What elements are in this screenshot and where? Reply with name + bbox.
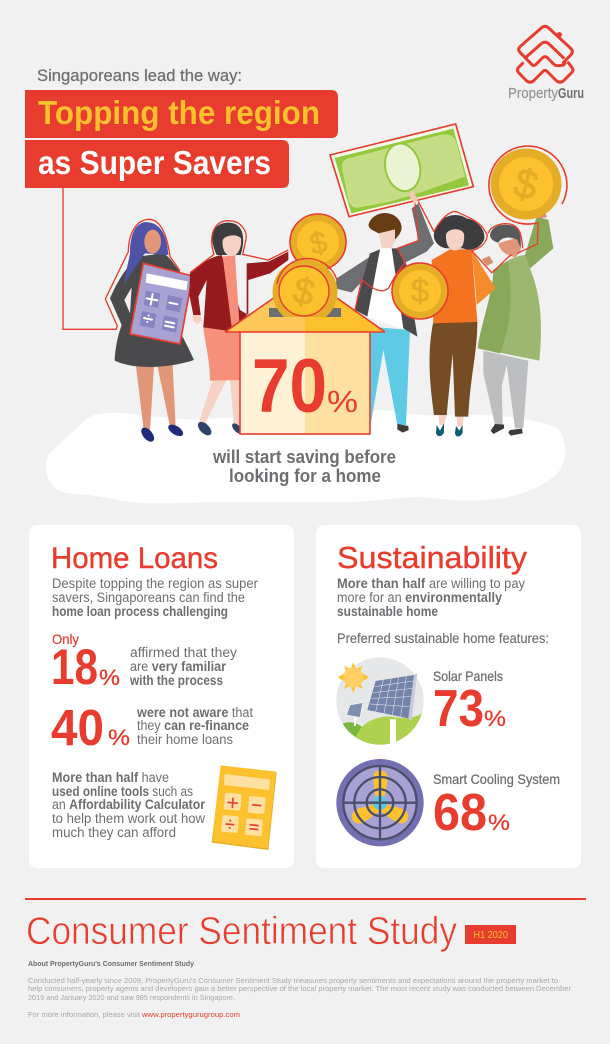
icon: yellow calculator [212,765,277,850]
house savings box [225,259,385,434]
intro text [52,576,258,619]
icon: smart cooling fan [336,759,424,846]
heading: home loans: Home Loans [51,542,218,575]
logo: PropertyGuru: Guru [558,85,584,102]
icon: purple calculator [130,263,192,344]
panel: sustainability [316,525,581,868]
intro text: more for an environmentally [337,590,502,605]
badge: H1 2020: H1 2020 [474,929,508,941]
coin: held by woman [290,214,346,270]
more information link [28,1010,240,1019]
stat: 40 percent: 40 [51,699,104,756]
stat: 18 percent: are very familiar [130,659,227,674]
text: online tools: used online tools such as [52,784,193,799]
more information link: www.propertygurugroup.com [141,1010,240,1019]
stat: 18 percent: % [99,665,120,690]
caption: will start saving: will start saving before [212,446,396,467]
text: online tools: an Affordability Calculator [52,797,206,812]
text: online tools: More than half have [52,770,169,785]
stat: solar panels 73 percent [433,668,506,738]
stat: solar panels 73 percent: % [484,706,506,731]
stat: 40 percent [51,699,253,756]
intro text: Despite topping the region as super [52,576,258,591]
coin: held by man: $ [411,272,429,309]
intro text: More than half are willing to pay [337,576,525,591]
coin: raised top right: $ [509,159,543,209]
stat: 18 percent: Only [52,631,79,647]
coin: raised top right [489,146,567,224]
person: man with grey arms holding banknote [335,203,434,433]
text: online tools [52,770,206,840]
logo: PropertyGuru [508,26,584,102]
intro text: home loan process challenging [52,604,228,619]
heading: sustainability: Sustainability [337,540,528,575]
stat: solar panels 73 percent: Solar Panels [433,668,503,684]
badge: H1 2020 [465,925,516,944]
banknote [330,124,473,232]
more information link: For more information, please visit [28,1010,141,1019]
coin: held by woman: $ [306,225,331,261]
stat: 40 percent: were not aware that [136,705,253,720]
intro text: sustainable home [337,604,438,619]
white ground blob [46,410,565,503]
coin: held by man [392,263,448,319]
kicker text: Singaporeans lead the way: [37,66,242,85]
stat: 40 percent: % [108,725,130,750]
text: online tools: much they can afford [52,825,176,840]
logo: PropertyGuru: Property [508,85,558,102]
stat: 18 percent: affirmed that they [130,645,237,660]
text: online tools: to help them work out how [52,811,205,826]
about text: Conducted half-yearly since 2009, PropertyGuru's Consumer Sentiment Study measures property sentiments and expectations around the property market to [28,976,558,985]
stat: solar panels 73 percent: 73 [433,680,484,738]
about text: 2019 and January 2020 and saw 985 respondents in Singapore. [28,993,235,1002]
stat: 18 percent: with the process [129,673,223,688]
title banner: as Super Savers: as Super Savers [38,144,271,181]
person: woman in red jacket [189,221,288,438]
stat: smart cooling 68 percent [433,771,560,842]
intro text: savers, Singaporeans can find the [52,590,245,605]
panel: home loans [29,525,294,868]
about heading: About PropertyGuru's Consumer Sentiment Study [28,959,195,968]
stat: smart cooling 68 percent: 68 [433,784,487,842]
footer title: Consumer Sentiment Study [26,910,457,953]
person: woman in orange [430,211,512,437]
intro text [337,576,525,619]
stat: 18 percent: 18 [51,639,98,695]
house savings box: 70 [252,344,327,429]
stat: 40 percent: they can re-finance [137,718,249,733]
stat: smart cooling 68 percent: Smart Cooling System [433,771,560,787]
subheading: features: Preferred sustainable home features: [337,631,549,646]
stat: 40 percent: their home loans [137,732,233,747]
about text [28,976,571,1002]
house savings box: % [327,384,358,419]
about text: help consumers, property agents and developers gain a better perspective of the local property market. The most recent study was conducted between December [28,984,571,993]
person: woman with calculator [63,188,194,444]
coin: dropping into box: $ [289,269,319,314]
caption: will start saving: looking for a home [229,465,381,486]
coin: dropping into box [272,259,338,324]
stat: 18 percent [51,631,237,695]
stat: smart cooling 68 percent: % [488,810,510,835]
icon: solar panels [333,657,425,747]
title banner: Topping the region: Topping the region [38,94,320,131]
caption: will start saving [212,446,396,486]
person: man in green [478,207,553,436]
